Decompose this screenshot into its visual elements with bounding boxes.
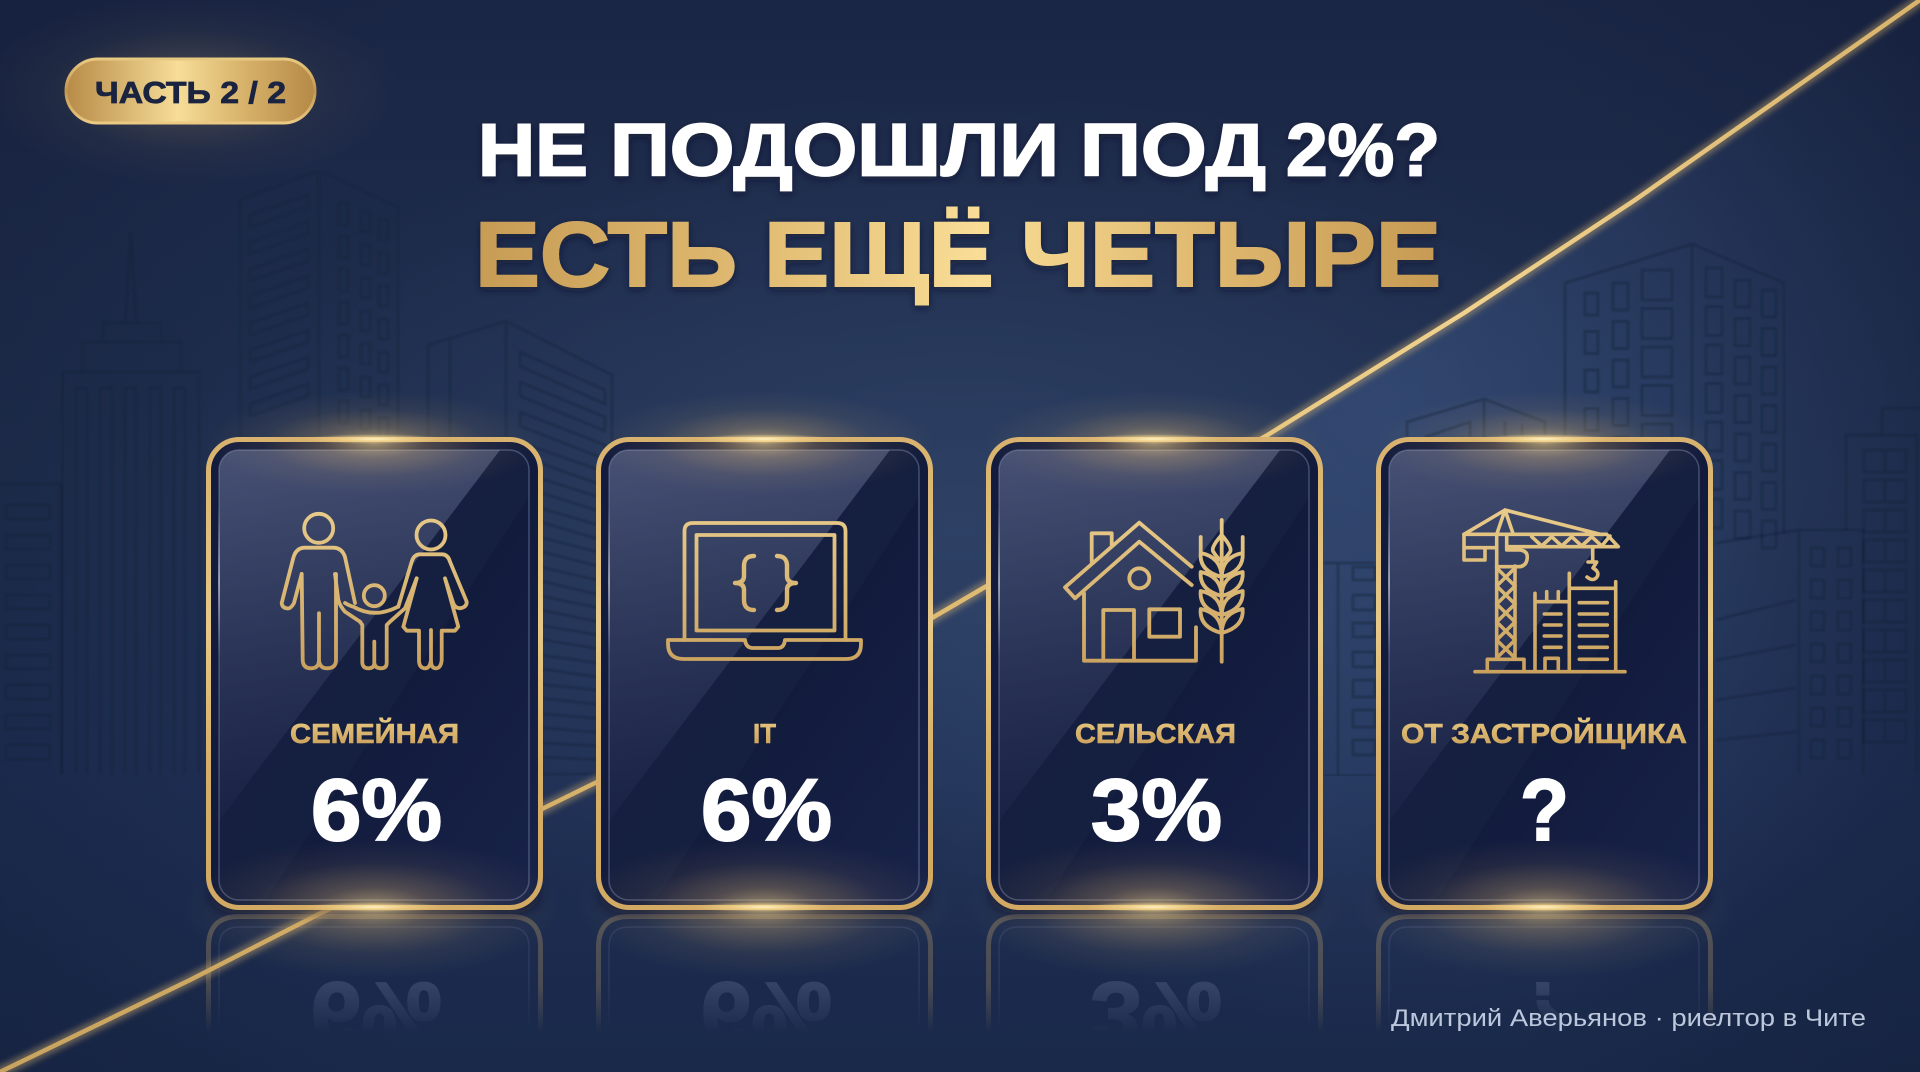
title line two: ЕЩЁ (764, 204, 994, 306)
title line one (478, 108, 1440, 192)
building: left low block (0, 484, 61, 774)
title line one: ПОД (1080, 108, 1266, 192)
rate: unknown: ? (1520, 762, 1569, 859)
panel: rural mortgage card (964, 391, 1344, 978)
card reflections (206, 914, 1713, 1024)
icon: house and wheat (1065, 520, 1243, 662)
reflection: card three (986, 914, 1323, 1024)
rate: rural: 3% (1091, 762, 1222, 859)
building: right low block (1716, 530, 1863, 774)
building: spire tower (62, 233, 199, 774)
reflection: card four (1376, 914, 1713, 1024)
icon: family (282, 514, 467, 668)
building: block between cards three and four (1324, 563, 1375, 776)
panel: family mortgage card (184, 391, 564, 978)
icon: crane and buildings (1464, 510, 1625, 672)
panel: developer mortgage card (1354, 391, 1734, 978)
building: far right block (1846, 408, 1920, 774)
label: IT: IT (753, 718, 776, 749)
building: centre-left block (428, 321, 612, 774)
rate: IT: 6% (701, 762, 832, 859)
reflection: card two: 6% (701, 964, 832, 1061)
label: developer: ОТ ЗАСТРОЙЩИКА (1401, 717, 1687, 749)
building: low block behind card four (1407, 399, 1545, 437)
title line two: ЕСТЬ (475, 204, 737, 306)
label: family: СЕМЕЙНАЯ (290, 717, 459, 749)
icon: laptop with code braces (668, 523, 861, 659)
badge: part 2 of 2 (0, 0, 400, 185)
label: rural: СЕЛЬСКАЯ (1075, 718, 1236, 749)
title line one: НЕ (478, 108, 588, 192)
title line two (475, 204, 1441, 306)
reflection: card three: 3% (1091, 964, 1222, 1061)
building: diagonal tower (240, 170, 398, 438)
building: large right tower (1565, 244, 1784, 548)
rate: family: 6% (311, 762, 442, 859)
reflection: card one (206, 914, 543, 1024)
footer credit: Дмитрий Аверьянов · риелтор в Чите (1391, 1005, 1866, 1032)
reflection: card four: ? (1520, 964, 1569, 1061)
title line one: 2%? (1286, 108, 1440, 192)
panel: IT mortgage card (574, 391, 954, 978)
reflection: card two (596, 914, 933, 1024)
skyline: faint buildings background (0, 170, 1920, 776)
title (475, 108, 1441, 306)
title line one: ПОДОШЛИ (610, 108, 1059, 192)
badge: part 2 of 2: ЧАСТЬ 2 / 2 (95, 75, 286, 110)
reflection: card one: 6% (311, 964, 442, 1061)
title line two: ЧЕТЫРЕ (1021, 204, 1441, 306)
